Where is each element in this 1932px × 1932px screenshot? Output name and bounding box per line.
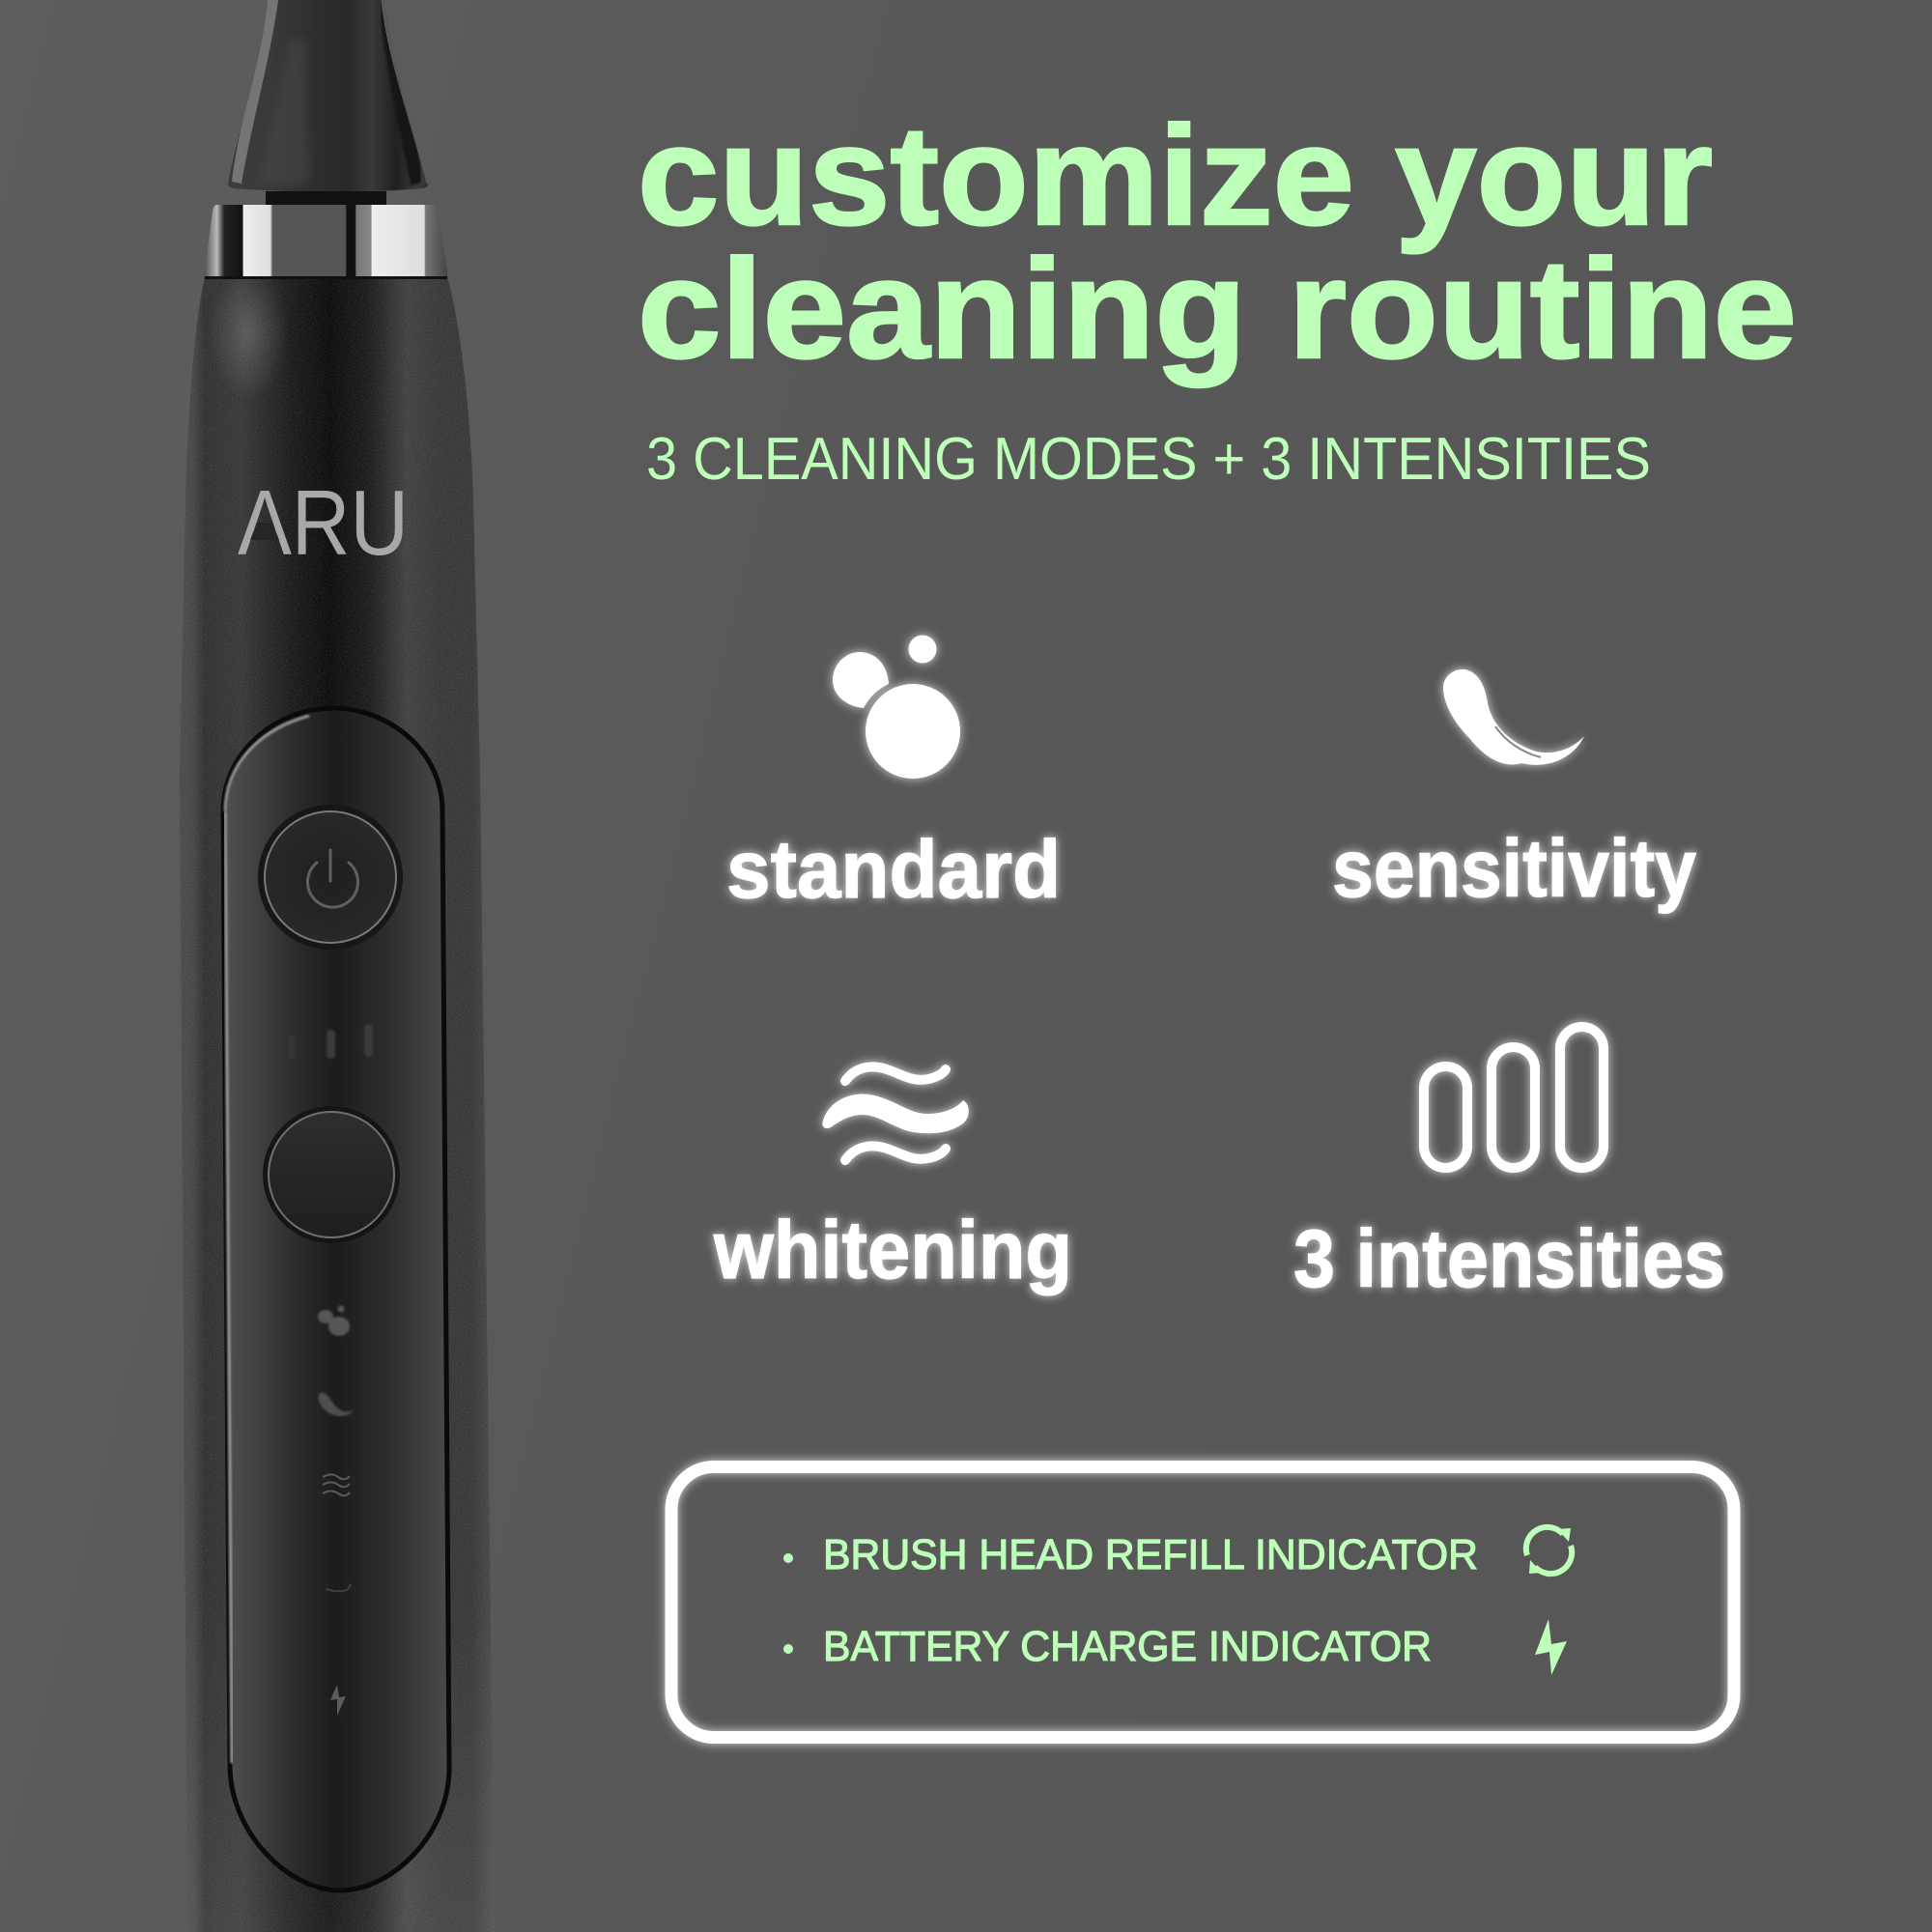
icon: bubbles (833, 636, 960, 779)
icon: three bars (1424, 1027, 1604, 1168)
panel icon: lightning (330, 1685, 346, 1716)
icon: power (307, 850, 357, 907)
bullet: battery charge indicator: BATTERY CHARGE INDICATOR (823, 1623, 1432, 1670)
title (638, 97, 1797, 387)
toothbrush product (174, 0, 502, 1932)
label: whitening: whitening (713, 1205, 1072, 1295)
LED indicators (288, 1024, 373, 1059)
mode: sensitivity (1332, 669, 1696, 914)
callout box (671, 1466, 1734, 1737)
mode button (263, 1106, 400, 1243)
handle body (174, 266, 502, 1932)
ARU logo: ARU (238, 471, 409, 575)
title: cleaning routine (638, 230, 1797, 387)
mode: whitening (713, 1066, 1072, 1295)
neck gap (266, 191, 386, 205)
title: customize your (638, 97, 1713, 254)
box outline (671, 1466, 1734, 1737)
metal ring (205, 205, 447, 277)
icon: lightning (1535, 1619, 1567, 1675)
label: 3 intensities: 3 intensities (1293, 1213, 1725, 1304)
panel icon: faint intensity mark (326, 1584, 351, 1591)
control panel (223, 708, 449, 1890)
label: standard: standard (726, 824, 1061, 915)
bullet: brush head refill indicator: BRUSH HEAD REFILL INDICATOR (823, 1531, 1478, 1578)
icon: waves (822, 1066, 969, 1160)
icon: refresh (1526, 1527, 1572, 1574)
brush head cone (222, 0, 435, 198)
label: sensitivity: sensitivity (1332, 823, 1696, 914)
icon: feather (1443, 669, 1584, 765)
panel icon: bubbles (318, 1306, 350, 1336)
power button (258, 805, 403, 950)
intensities (1293, 1027, 1725, 1304)
panel icon: waves (323, 1474, 350, 1495)
panel icon: feather (319, 1393, 354, 1416)
mode: standard (726, 636, 1061, 915)
subtitle: 3 CLEANING MODES + 3 INTENSITIES (646, 426, 1651, 493)
